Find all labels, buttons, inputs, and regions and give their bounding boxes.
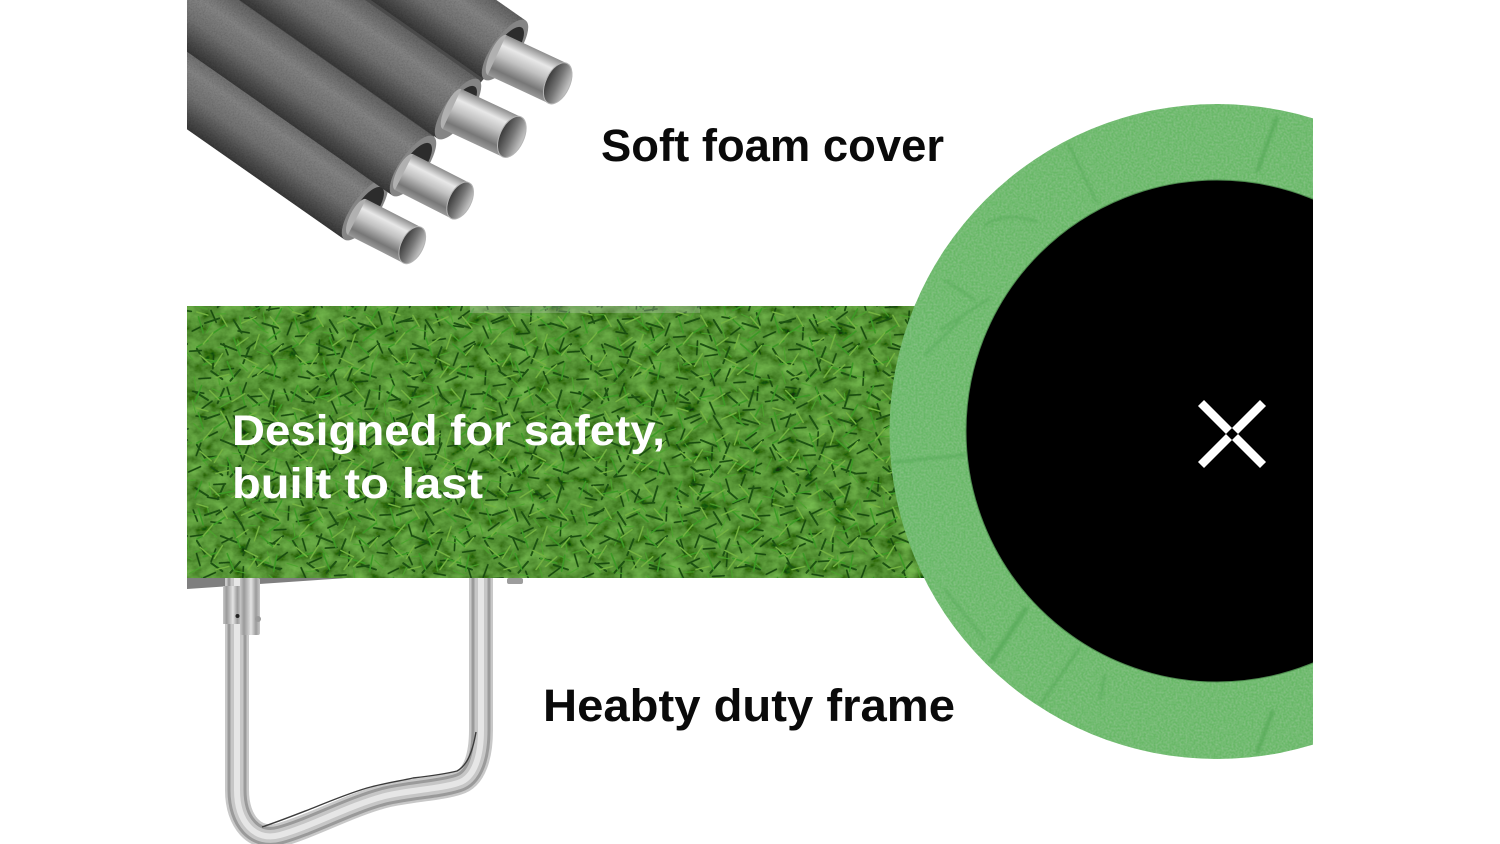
sleeve knob	[255, 616, 261, 622]
bent pipe	[237, 578, 481, 836]
heading: heavy duty frame: Heabty duty frame	[543, 680, 955, 731]
sleeve pin	[236, 614, 240, 618]
grass blades back	[187, 306, 947, 578]
grass base texture	[187, 306, 947, 578]
shadow fill between tubes	[238, 0, 484, 137]
centre cross mark	[1201, 403, 1263, 465]
tube 1	[371, 0, 572, 104]
tube 2	[240, 0, 527, 158]
infographic canvas	[187, 0, 1313, 844]
bolt	[507, 578, 523, 584]
image: foam covered tubes	[187, 0, 572, 264]
sleeve rear	[223, 586, 241, 624]
grass blades front	[187, 306, 947, 578]
faint watermark strip	[470, 306, 700, 313]
heading: designed for safety: Designed for safety,	[232, 407, 665, 455]
grass tint	[187, 306, 947, 578]
heading: designed for safety: built to last	[232, 460, 483, 508]
heading: soft foam cover: Soft foam cover	[601, 120, 944, 171]
black mat	[966, 180, 1313, 682]
tube 3	[187, 0, 474, 220]
frame rail	[187, 578, 347, 589]
sleeve front	[240, 578, 260, 635]
seams and wrinkles	[893, 117, 1277, 753]
heading: designed for safety	[232, 407, 665, 508]
tube 4	[187, 52, 426, 264]
green padded ring	[890, 104, 1313, 759]
image: steel frame leg	[187, 578, 523, 836]
panel: grass banner	[187, 306, 947, 578]
image: trampoline top view	[890, 104, 1313, 759]
